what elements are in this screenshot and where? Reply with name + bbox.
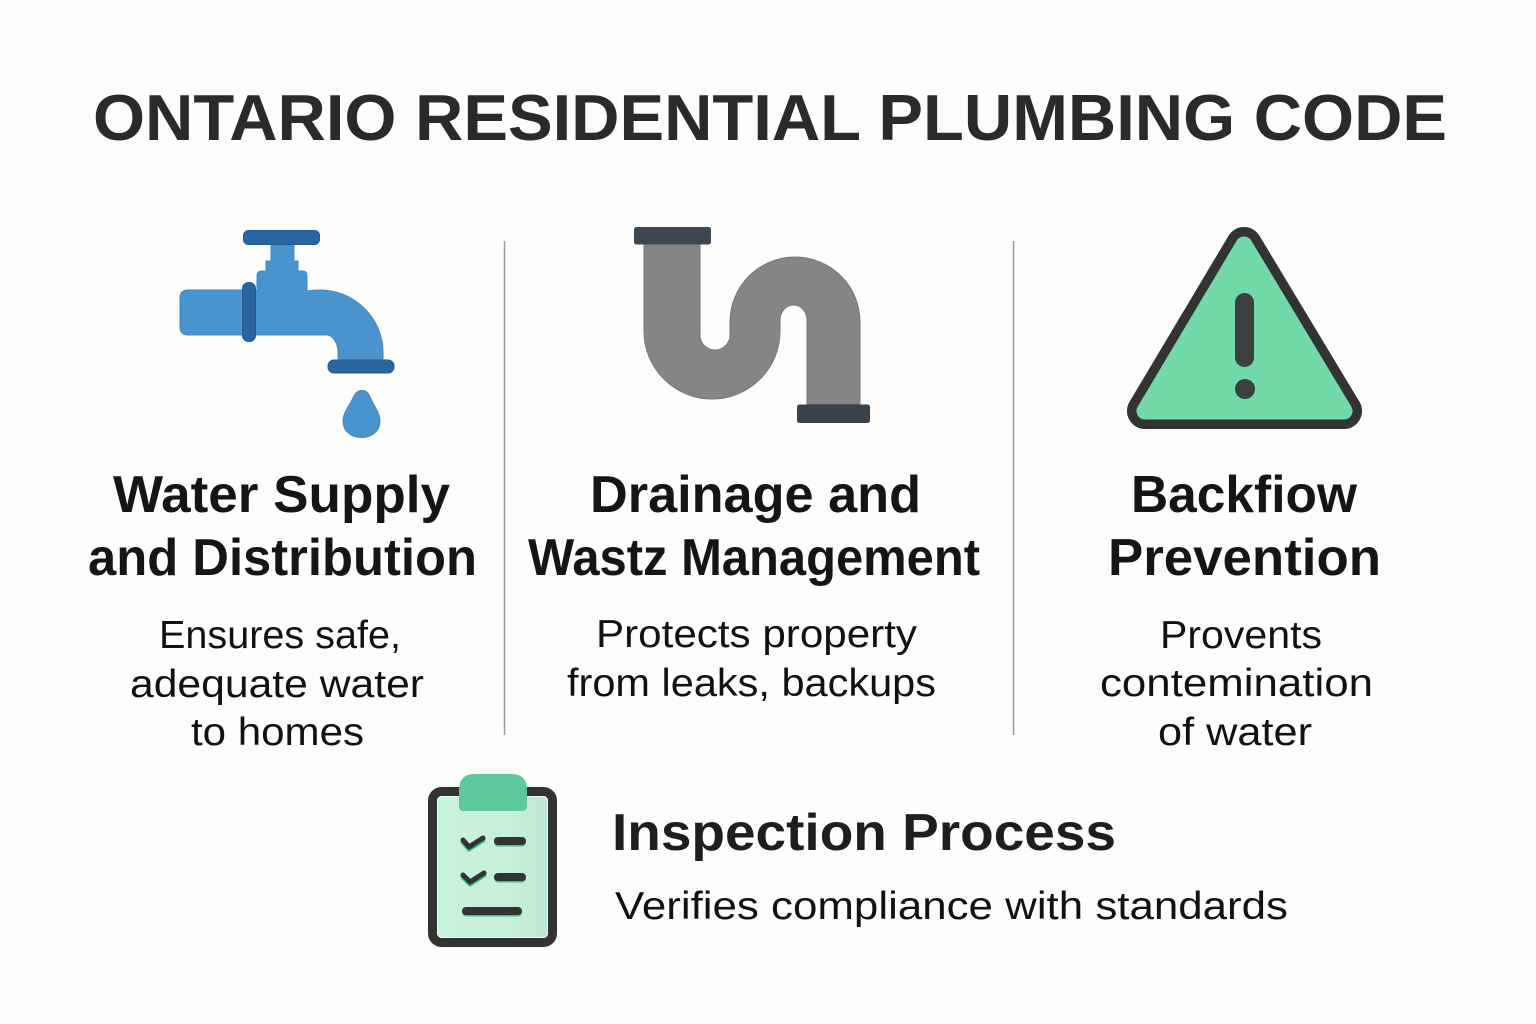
panel: drainage and waste (528, 227, 980, 705)
heading: backflow prevention (1108, 466, 1381, 587)
description: backflow prevention: of water (1158, 711, 1312, 754)
icon: water faucet (180, 230, 394, 438)
heading: water supply: Water Supply (113, 466, 450, 524)
panel: backflow prevention (1100, 227, 1381, 754)
icon: warning triangle (1127, 227, 1362, 429)
heading: drainage and waste: Drainage and (590, 466, 921, 524)
icon: checklist clipboard (432, 774, 552, 942)
panel: water supply (88, 230, 477, 754)
heading: drainage and waste (528, 466, 980, 587)
description: drainage and waste (567, 613, 936, 705)
description: backflow prevention (1100, 614, 1373, 754)
description: water supply: to homes (191, 711, 364, 754)
description: water supply: adequate water (130, 663, 424, 706)
heading: inspection process: Inspection Process (612, 804, 1116, 862)
heading: water supply: and Distribution (88, 529, 477, 587)
heading: backflow prevention: Backfiow (1131, 466, 1358, 524)
title: ONTARIO RESIDENTIAL PLUMBING CODE (93, 81, 1447, 154)
description: water supply (130, 614, 424, 754)
heading: backflow prevention: Prevention (1108, 529, 1381, 587)
heading: water supply (88, 466, 477, 587)
description: water supply: Ensures safe, (159, 614, 401, 657)
description: inspection process: Verifies compliance with standards (615, 885, 1288, 928)
heading: drainage and waste: Wastz Management (528, 529, 980, 587)
icon: drain trap pipe (634, 227, 870, 423)
panel: inspection process (432, 774, 1288, 942)
description: drainage and waste: Protects property (596, 613, 918, 656)
description: backflow prevention: contemination (1100, 662, 1373, 705)
description: drainage and waste: from leaks, backups (567, 662, 936, 705)
description: backflow prevention: Provents (1160, 614, 1322, 657)
